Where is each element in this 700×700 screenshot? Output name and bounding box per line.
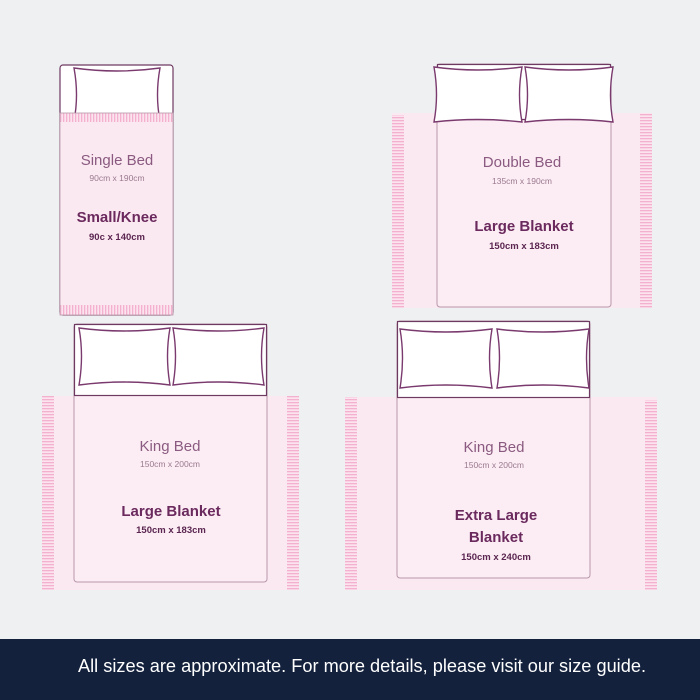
text: single bed label: Small/Knee bbox=[77, 209, 157, 226]
text: single bed label: 90cm x 190cm bbox=[89, 173, 145, 183]
text: double bed label bbox=[474, 154, 574, 252]
bed frame king 2 bbox=[397, 321, 590, 578]
text: double bed label: 150cm x 183cm bbox=[489, 241, 559, 252]
text: king bed XL label bbox=[455, 439, 537, 563]
icon: pillows double bbox=[434, 67, 613, 122]
text: single bed label: Single Bed bbox=[81, 152, 153, 169]
text: king bed XL label: King Bed bbox=[464, 439, 524, 456]
icon: pillows king bbox=[79, 328, 264, 385]
icon: pillows king 2 bbox=[400, 329, 589, 388]
bed frame single bbox=[60, 65, 173, 315]
icon: pillow single bbox=[74, 68, 160, 121]
blanket small/knee bbox=[60, 113, 173, 315]
blanket extra large bbox=[345, 397, 657, 590]
blanket large double bbox=[392, 113, 652, 308]
text: king bed XL label: Extra Large bbox=[455, 507, 537, 524]
bed frame double bbox=[437, 64, 611, 307]
footer bar bbox=[0, 639, 700, 700]
panel: king bed large blanket bbox=[42, 324, 299, 590]
blanket large king bbox=[42, 396, 299, 590]
bed frame king bbox=[74, 324, 267, 582]
text: king bed XL label: 150cm x 240cm bbox=[461, 552, 531, 563]
panel: king bed extra large blanket bbox=[345, 321, 657, 590]
footer text: All sizes are approximate. For more details, please visit our size guide. bbox=[78, 656, 646, 676]
text: king bed XL label: Blanket bbox=[469, 529, 523, 546]
text: king bed label bbox=[121, 438, 221, 536]
text: king bed label: 150cm x 200cm bbox=[140, 459, 200, 469]
text: single bed label: 90c x 140cm bbox=[89, 232, 145, 243]
text: king bed label: King Bed bbox=[140, 438, 200, 455]
text: double bed label: Large Blanket bbox=[474, 218, 574, 235]
text: single bed label bbox=[77, 152, 157, 243]
text: king bed label: Large Blanket bbox=[121, 503, 221, 520]
panel: single bed bbox=[60, 65, 173, 315]
text: double bed label: 135cm x 190cm bbox=[492, 176, 552, 186]
panel: double bed bbox=[392, 64, 652, 308]
text: king bed XL label: 150cm x 200cm bbox=[464, 460, 524, 470]
text: king bed label: 150cm x 183cm bbox=[136, 525, 206, 536]
text: double bed label: Double Bed bbox=[483, 154, 561, 171]
